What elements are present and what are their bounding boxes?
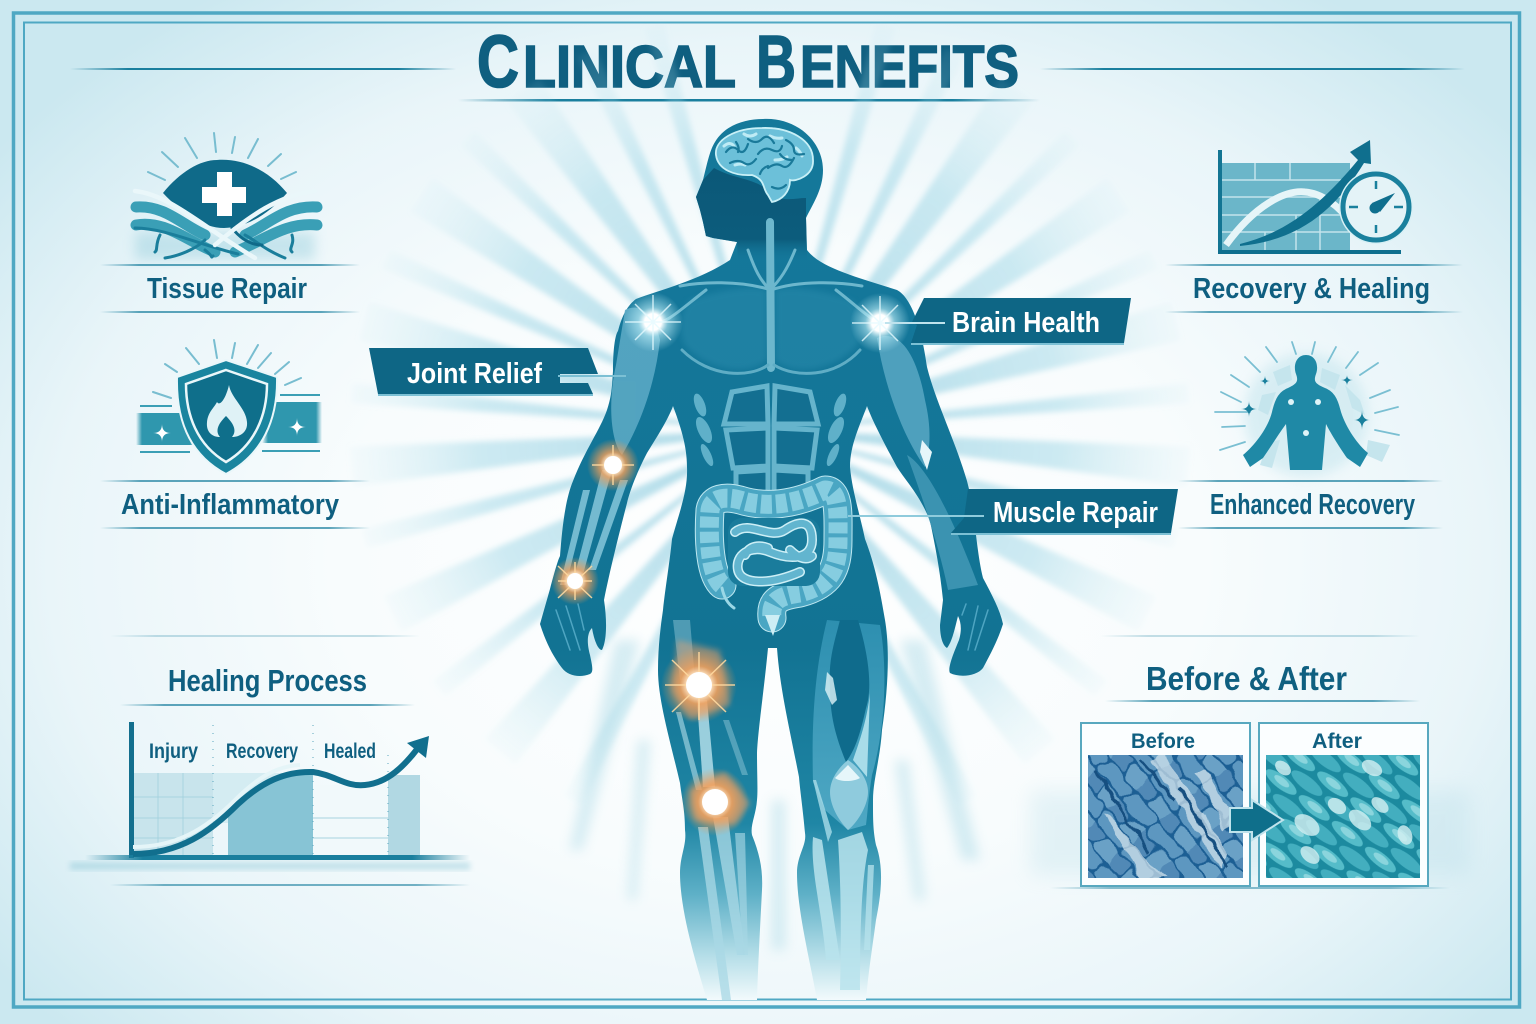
label: Brain Health — [885, 298, 1131, 345]
right arm muscles — [877, 336, 978, 590]
right lower leg stripes — [813, 832, 874, 990]
icon: shield with flame — [136, 340, 322, 474]
divider and label: Anti-Inflammatory — [121, 489, 339, 521]
title: C — [477, 20, 519, 103]
panel: Tissue Repair — [100, 133, 360, 313]
chest and neck lines — [655, 222, 885, 373]
divider and label: Recovery & Healing — [1193, 273, 1430, 305]
icon: glowing body — [1215, 342, 1399, 477]
before image card: Before — [1131, 730, 1195, 753]
panel: Before & After: Before & After — [1146, 660, 1347, 697]
lower leg rays — [570, 640, 980, 950]
after image card — [1259, 723, 1428, 886]
line chart — [70, 722, 470, 870]
left leg bones and stripes — [673, 620, 748, 1000]
glow points — [551, 292, 910, 836]
small intestines — [728, 518, 820, 586]
panel: Recovery & Healing — [1165, 140, 1463, 313]
title: B — [756, 20, 796, 103]
icon: tissue with cross — [135, 133, 317, 260]
label: Muscle Repair — [848, 489, 1178, 535]
orange inflammation patches — [672, 640, 750, 825]
label: Joint Relief: Joint Relief — [407, 358, 542, 390]
after image card: After — [1312, 730, 1362, 753]
face shadow — [696, 168, 807, 262]
divider and label: Tissue Repair — [147, 273, 307, 305]
right leg muscles — [813, 620, 884, 842]
panel: Healing Process: Healing Process — [168, 663, 367, 698]
panel: Anti-Inflammatory — [100, 340, 370, 529]
pectoral muscles — [681, 288, 861, 369]
title: LINICAL — [523, 34, 736, 100]
label: Joint Relief — [369, 348, 626, 396]
human body figure — [540, 119, 1003, 1000]
title — [70, 20, 1465, 103]
body silhouette — [540, 119, 1003, 1000]
line chart: Injury — [149, 740, 198, 763]
line chart: Recovery — [226, 740, 298, 763]
abdominal muscles — [724, 386, 818, 500]
arrow between cards — [1230, 800, 1283, 840]
label: Brain Health: Brain Health — [952, 307, 1100, 339]
title: ENEFITS — [800, 34, 1019, 100]
side rib muscles — [691, 392, 849, 468]
panel: Healing Process — [70, 635, 470, 886]
panel: Before & After — [1030, 635, 1470, 898]
label: Muscle Repair: Muscle Repair — [993, 497, 1158, 529]
icon: chart with clock — [1218, 140, 1411, 254]
line chart: Healed — [324, 740, 376, 763]
radiating light rays — [350, 24, 1190, 806]
left arm muscles — [560, 308, 660, 585]
brain — [716, 128, 813, 202]
colon — [709, 490, 838, 636]
chart fill bands — [133, 771, 420, 855]
hand finger lines — [556, 604, 988, 650]
divider and label: Enhanced Recovery — [1210, 489, 1415, 521]
panel: Enhanced Recovery — [1178, 342, 1443, 529]
before image card — [1080, 722, 1251, 887]
